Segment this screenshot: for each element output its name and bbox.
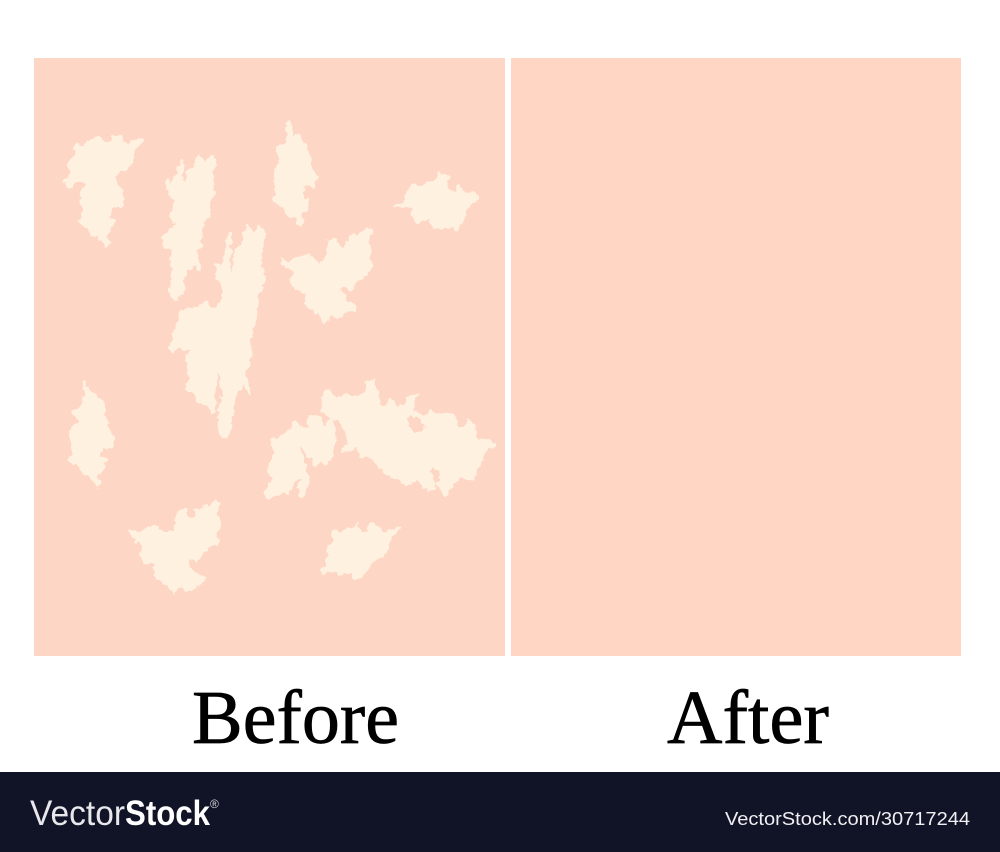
- patches: lower right group: [265, 379, 494, 578]
- footer logo: [30, 794, 219, 833]
- footer logo: Stock: [125, 794, 210, 833]
- panel: before skin: [34, 58, 505, 656]
- footer logo: Vector: [30, 794, 125, 833]
- footer band: [0, 772, 1000, 852]
- panel: after skin: [511, 58, 961, 656]
- heading: before: Before: [192, 676, 399, 760]
- heading: after: After: [667, 676, 829, 760]
- footer logo: ®: [210, 797, 219, 811]
- patches: upper left group: [64, 136, 265, 438]
- patches: lower left group: [70, 382, 220, 593]
- vitiligo patches: [64, 122, 494, 593]
- footer image id: VectorStock.com/30717244: [725, 809, 970, 829]
- patches: upper right group: [273, 122, 478, 323]
